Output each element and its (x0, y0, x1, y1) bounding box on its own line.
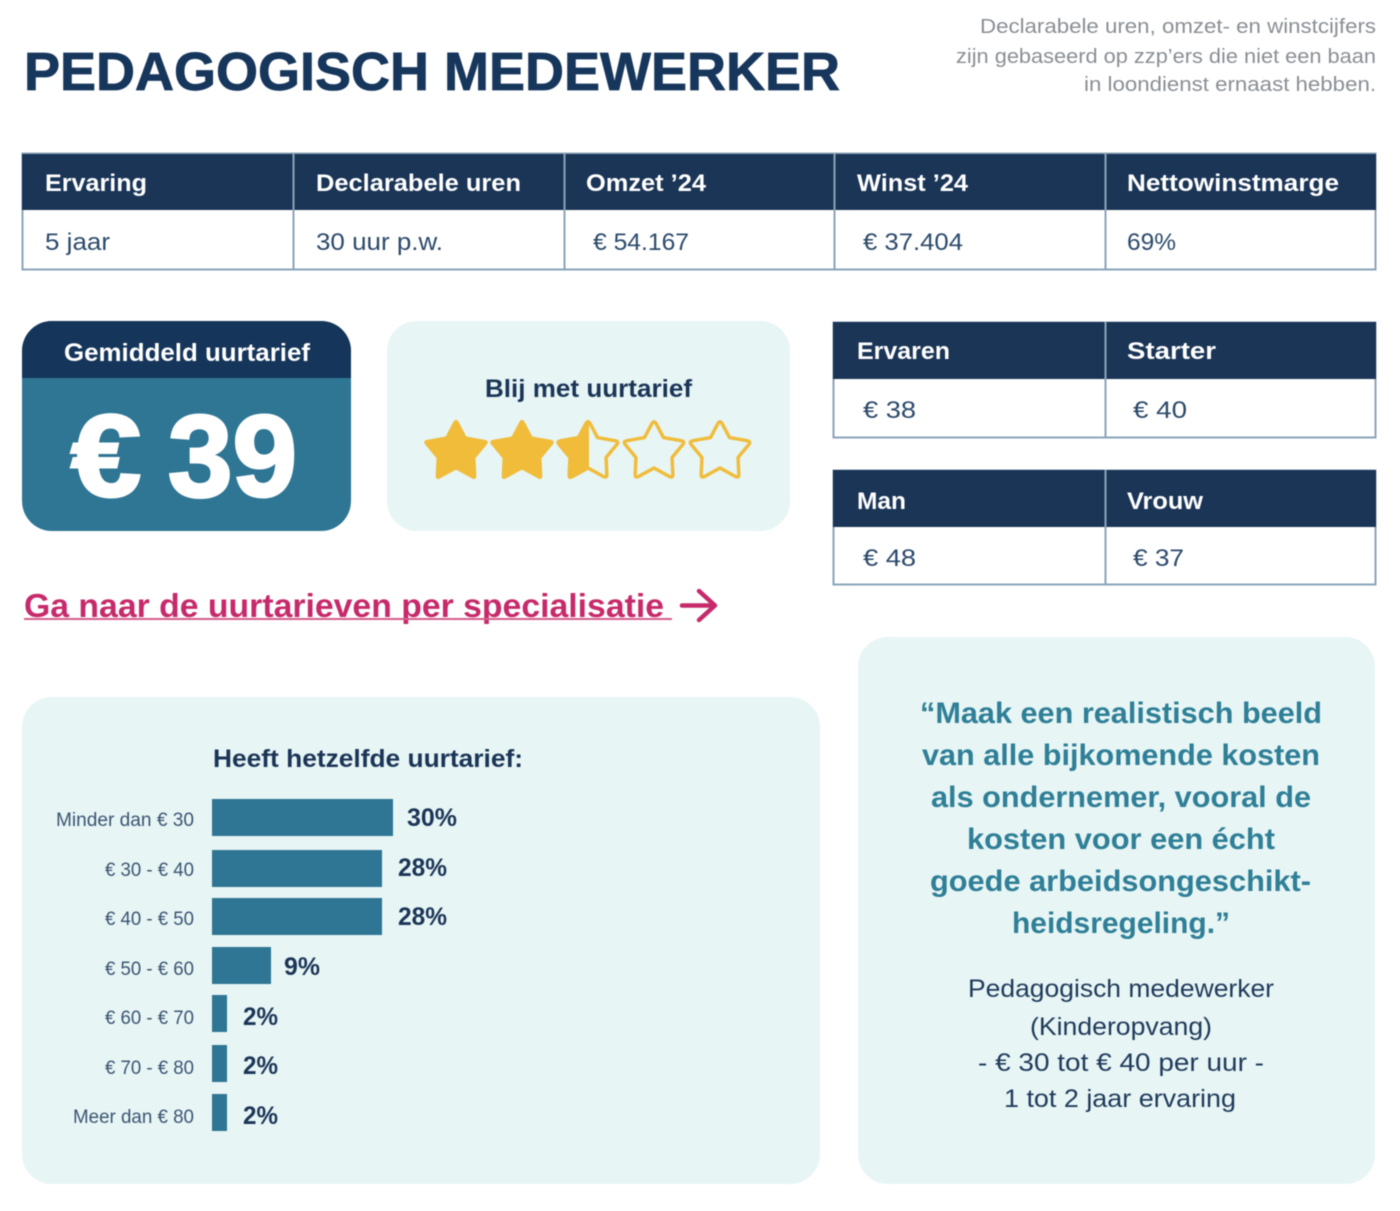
bar chart: € 70 - € 80 (105, 1058, 194, 1079)
panel: average hourly rate: 39 (168, 391, 297, 521)
panel: average hourly rate: Gemiddeld uurtarief (64, 339, 311, 367)
quote attribution: Pedagogisch medewerker (968, 975, 1274, 1003)
bar chart: 9% (284, 953, 320, 981)
icon: arrow (682, 591, 715, 620)
quote attribution: 1 tot 2 jaar ervaring (1004, 1085, 1236, 1113)
table: key figures: Ervaring (45, 170, 147, 197)
table: man vs woman: Man (857, 488, 906, 515)
panel: bar chart of hourly rates (22, 697, 820, 1184)
table: key figures: 30 uur p.w. (316, 229, 443, 256)
title: PEDAGOGISCH MEDEWERKER (24, 42, 840, 102)
bar chart: € 50 - € 60 (105, 959, 194, 980)
panel: satisfaction rating (387, 321, 790, 531)
table: experienced vs starter (833, 322, 1376, 438)
table: experienced vs starter: € 38 (863, 397, 916, 424)
table: experienced vs starter: € 40 (1133, 397, 1187, 424)
table: man vs woman: € 48 (863, 545, 916, 572)
link: rates per specialisation: Ga naar de uurtarieven per specialisatie (24, 587, 664, 624)
quote attribution: - € 30 tot € 40 per uur - (978, 1049, 1264, 1077)
bar chart: € 40 - € 50 (105, 909, 194, 930)
bar chart: Meer dan € 80 (73, 1107, 194, 1128)
quote attribution: (Kinderopvang) (1030, 1013, 1212, 1041)
panel: quote (858, 637, 1375, 1184)
bar chart: 28% (398, 854, 447, 882)
table: experienced vs starter: Ervaren (857, 338, 950, 365)
bar chart: Minder dan € 30 (56, 810, 194, 831)
panel: bar chart of hourly rates: Heeft hetzelfde uurtarief: (213, 745, 523, 773)
panel: satisfaction rating: Blij met uurtarief (485, 375, 693, 403)
note: basis of the figures (956, 16, 1376, 96)
quote text: “Maak een realistisch beeld (920, 697, 1322, 730)
note: basis of the figures: in loondienst ernaast hebben. (1084, 74, 1376, 96)
bar chart: 2% (243, 1052, 278, 1080)
quote text: als ondernemer, vooral de (931, 781, 1311, 814)
table: key figures: € 54.167 (593, 229, 689, 256)
panel: average hourly rate: € (71, 391, 141, 521)
quote text: goede arbeidsongeschikt- (930, 865, 1311, 898)
table: key figures: Omzet ’24 (586, 170, 707, 197)
bar chart: 30% (407, 804, 457, 832)
note: basis of the figures: Declarabele uren, omzet- en winstcijfers (980, 16, 1376, 38)
table: key figures: € 37.404 (863, 229, 963, 256)
icon: five rating stars, two and a half filled (425, 420, 750, 479)
table: key figures: 5 jaar (45, 229, 110, 256)
note: basis of the figures: zijn gebaseerd op zzp’ers die niet een baan (956, 46, 1376, 68)
table: man vs woman: Vrouw (1127, 488, 1203, 515)
bar chart: 2% (243, 1003, 278, 1031)
quote text: kosten voor een écht (967, 823, 1275, 856)
quote text: van alle bijkomende kosten (922, 739, 1320, 772)
table: key figures: Nettowinstmarge (1127, 170, 1339, 197)
table: man vs woman (833, 470, 1376, 585)
bar chart: € 60 - € 70 (105, 1008, 194, 1029)
table: key figures: Winst ’24 (857, 170, 969, 197)
table: experienced vs starter: Starter (1127, 338, 1216, 365)
table: key figures: 69% (1127, 229, 1176, 256)
panel: average hourly rate (22, 321, 351, 531)
quote text (920, 697, 1322, 940)
table: key figures (22, 154, 1376, 270)
bar chart (56, 799, 457, 1131)
bar chart: 28% (398, 903, 447, 931)
quote attribution (968, 975, 1274, 1113)
bar chart: 2% (243, 1102, 278, 1130)
table: man vs woman: € 37 (1133, 545, 1184, 572)
bar chart: € 30 - € 40 (105, 860, 194, 881)
table: key figures: Declarabele uren (316, 170, 521, 197)
quote text: heidsregeling.” (1012, 907, 1230, 940)
